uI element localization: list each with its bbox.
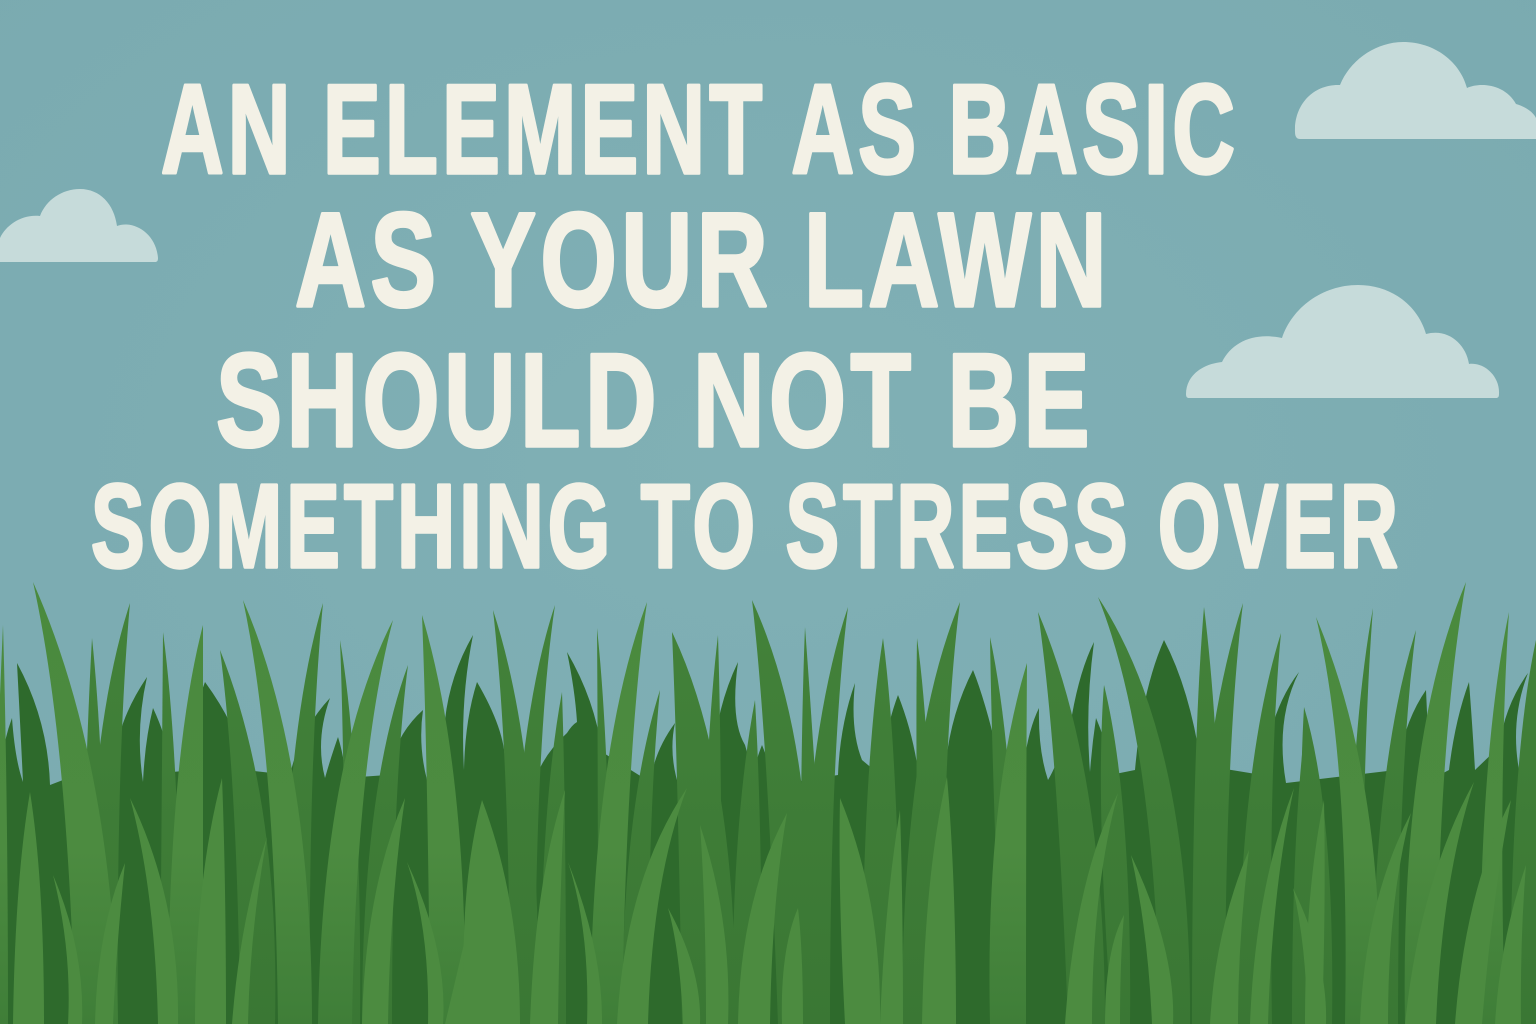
title [91,58,1402,593]
grass: middle layer [80,597,1536,1024]
cloud: top left [0,189,158,262]
cloud: top right [1295,42,1536,139]
cloud: middle right [1186,285,1499,398]
title line 3: SHOULD NOT BE [216,327,1094,475]
grass: low front blades [13,777,1526,1024]
grass: tall light blades [0,582,1509,1024]
grass: dark back layer [0,635,1536,1024]
title line 2: AS YOUR LAWN [295,186,1111,335]
